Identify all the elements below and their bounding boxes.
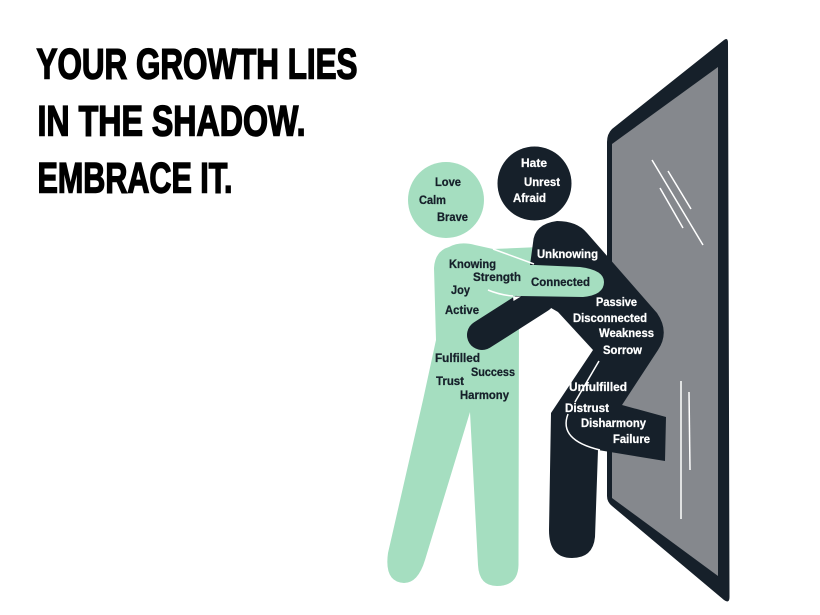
mirror — [607, 39, 730, 601]
green body labels: Connected — [531, 277, 590, 289]
green body and legs — [387, 243, 540, 586]
dark body labels: Passive — [596, 297, 637, 309]
dark body labels: Unknowing — [537, 249, 598, 261]
white contour lines — [488, 249, 600, 450]
dark head labels: Unrest — [524, 177, 560, 189]
dark head labels — [513, 158, 560, 205]
green head labels: Brave — [437, 212, 468, 224]
title — [36, 40, 358, 202]
dark body labels: Distrust — [565, 403, 609, 415]
green body labels: Strength — [473, 272, 521, 284]
dark body labels — [537, 249, 654, 446]
dark body labels: Sorrow — [603, 345, 642, 357]
mirror frame — [607, 39, 730, 601]
dark head labels: Hate — [521, 158, 547, 170]
green head labels: Calm — [419, 195, 446, 207]
green body labels: Harmony — [460, 390, 510, 402]
green body labels: Knowing — [449, 259, 496, 271]
dark body labels: Failure — [613, 434, 650, 446]
green forearm — [488, 265, 604, 297]
dark body and legs — [520, 221, 666, 558]
dark figure — [482, 146, 666, 558]
dark body labels: Disharmony — [581, 418, 647, 430]
green body labels: Fulfilled — [435, 353, 480, 365]
green head labels — [419, 177, 468, 224]
green body labels: Trust — [436, 376, 464, 388]
mirror glass — [612, 67, 718, 576]
title: YOUR GROWTH LIES — [36, 40, 358, 88]
green body labels: Joy — [451, 285, 471, 297]
green figure — [387, 162, 540, 586]
mirror reflection lines — [652, 160, 703, 519]
title: IN THE SHADOW. — [38, 98, 306, 146]
green head labels: Love — [435, 177, 461, 189]
green head — [408, 162, 484, 238]
green body labels — [435, 259, 590, 402]
dark arm — [482, 298, 540, 335]
green body labels: Success — [471, 367, 515, 379]
dark head — [498, 146, 572, 220]
white wedge under forearm — [513, 296, 521, 301]
title: EMBRACE IT. — [38, 154, 232, 202]
green body labels: Active — [445, 305, 479, 317]
dark body labels: Weakness — [599, 328, 654, 340]
dark head labels: Afraid — [513, 193, 546, 205]
dark body labels: Unfulfilled — [569, 382, 627, 394]
dark body labels: Disconnected — [573, 313, 647, 325]
